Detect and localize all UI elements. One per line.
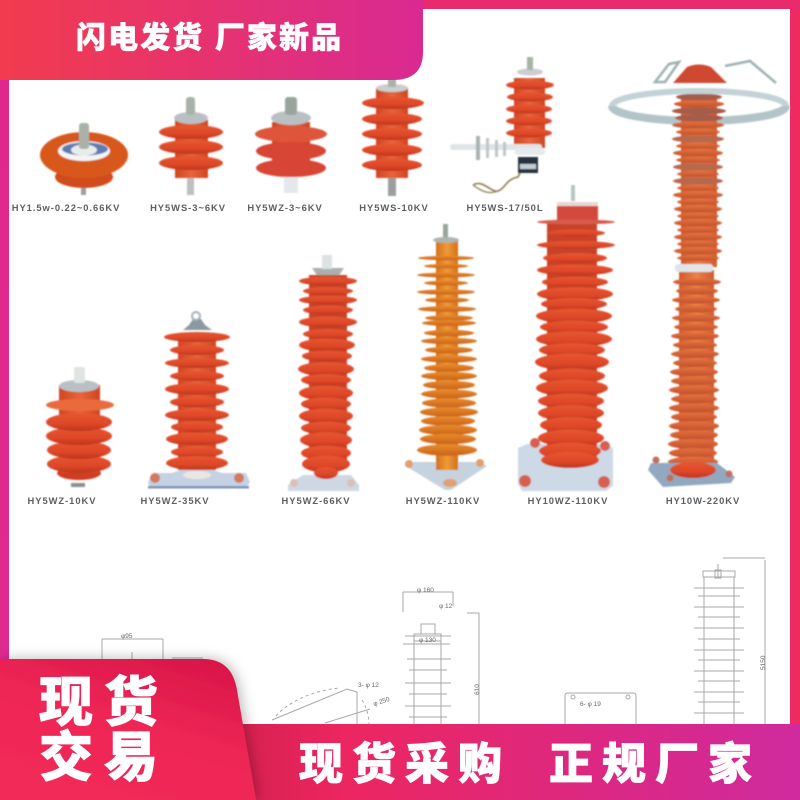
model labels: top row: HY5WS-17/50L <box>466 202 544 213</box>
model labels: bottom row: HY10W-220KV <box>666 495 740 506</box>
technical drawing 5: 5150 <box>760 655 767 670</box>
arrester: HY5WZ-110KV <box>404 224 487 490</box>
technical drawing 4: 6- φ 19 <box>580 701 601 708</box>
panel: spot trading badge <box>0 659 256 800</box>
banner: top headline <box>0 0 423 80</box>
ring upper half and middle flange <box>612 91 786 106</box>
arrester: HY10WZ-110KV <box>518 185 615 491</box>
slogan: 正规厂家: 正规厂家 <box>549 740 761 789</box>
model labels: bottom row: HY5WZ-66KV <box>282 495 350 506</box>
technical drawing 2: 3- φ 12 <box>358 682 379 689</box>
arrester: HY5WZ-35KV <box>148 312 250 488</box>
technical drawing 1: φ95 <box>121 633 133 640</box>
frame: left strip <box>0 70 9 670</box>
frame: top strip <box>400 0 800 9</box>
technical drawing 1 <box>102 633 203 665</box>
badge text: 现货: 现货 <box>39 673 169 733</box>
model labels: bottom row: HY5WZ-35KV <box>141 495 209 506</box>
base plate <box>648 463 735 487</box>
sheds <box>535 220 615 468</box>
model labels: top row <box>12 202 544 213</box>
sheds <box>417 256 478 456</box>
model labels: bottom row: HY5WZ-10KV <box>28 495 96 506</box>
arrester: HY5WZ-3~6KV <box>255 97 327 193</box>
technical drawing 4 <box>565 693 636 724</box>
arrester: HY5WS-17/50L <box>450 57 554 193</box>
technical drawing 3: φ 130 <box>419 637 436 644</box>
technical drawing 3: φ 12 <box>439 603 453 610</box>
model labels: bottom row: HY5WZ-110KV <box>406 495 480 506</box>
technical drawing 3 <box>403 587 481 726</box>
technical drawing 5 <box>694 558 767 724</box>
headline text: 闪电发货 厂家新品 <box>76 21 343 55</box>
model labels: top row: HY5WZ-3~6KV <box>247 202 323 213</box>
sheds: lower column <box>668 278 721 468</box>
frame: right strip <box>790 0 800 730</box>
sheds: upper column <box>672 94 726 261</box>
technical drawing 2 <box>272 682 391 727</box>
arrester: HY10W-220KV <box>612 61 786 487</box>
badge text: 交易: 交易 <box>39 728 169 788</box>
arrester: HY5WS-10KV <box>362 78 424 196</box>
model labels: bottom row: HY10WZ-110KV <box>528 495 608 506</box>
arrester: HY5WS-3~6KV <box>159 97 223 195</box>
arrester: HY5WZ-10KV <box>46 367 114 487</box>
technical drawing 3: φ 160 <box>417 587 434 594</box>
model labels: top row: HY1.5w-0.22~0.66KV <box>12 202 120 213</box>
banner: bottom slogan bar <box>230 724 800 800</box>
ring lower half <box>612 106 786 121</box>
sheds <box>298 276 357 479</box>
technical drawing 3: 610 <box>474 684 481 695</box>
model labels: top row: HY5WS-3~6KV <box>150 202 226 213</box>
arrester: HY5WZ-66KV <box>288 255 359 491</box>
arrester: HY1.5w-0.22~0.66KV <box>40 123 128 195</box>
technical drawing 2: φ 250 <box>372 696 391 708</box>
sheds <box>164 332 230 470</box>
model labels: bottom row <box>28 495 740 506</box>
model labels: top row: HY5WS-10KV <box>359 202 429 213</box>
slogan: 现货采购: 现货采购 <box>299 740 511 789</box>
